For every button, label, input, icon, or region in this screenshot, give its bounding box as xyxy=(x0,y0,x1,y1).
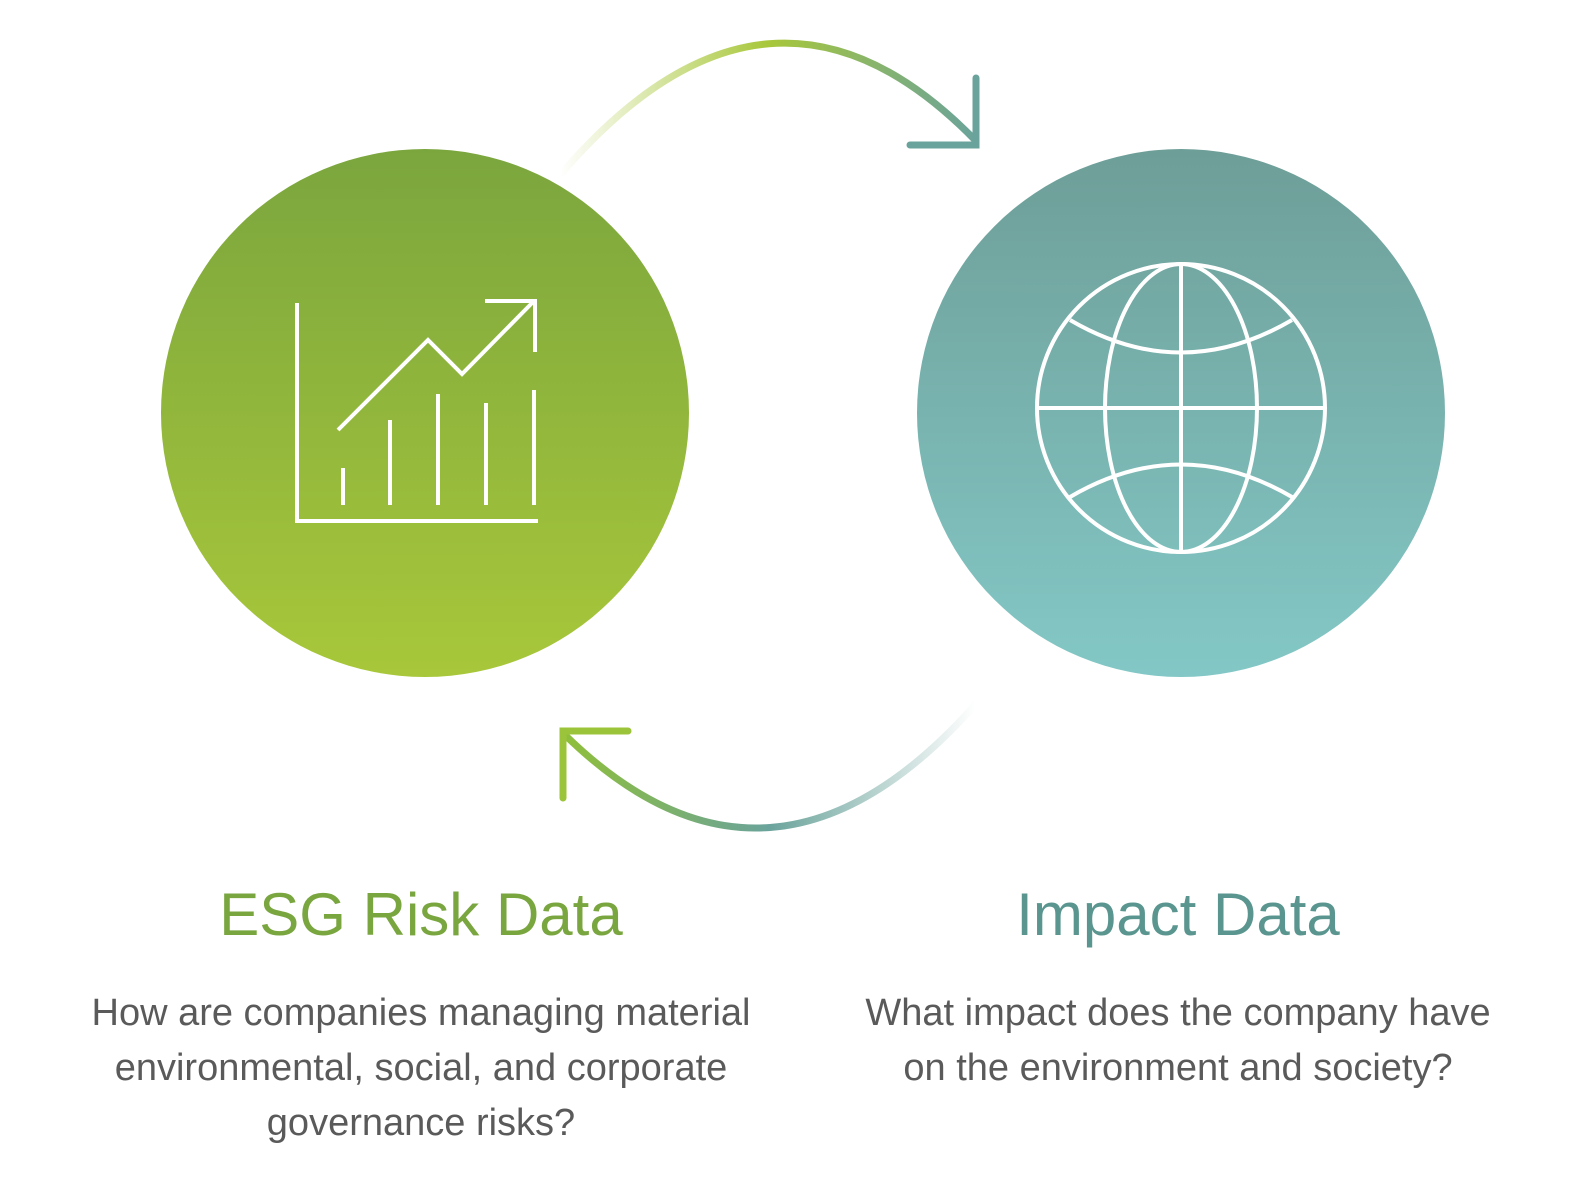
text: ESG description: environmental, social, and corporate xyxy=(115,1047,727,1089)
heading: ESG Risk Data: ESG Risk Data xyxy=(219,881,623,948)
text: ESG description: How are companies managing material xyxy=(92,992,750,1034)
panel: ESG risk circle xyxy=(161,149,689,677)
text: impact description: on the environment and society? xyxy=(903,1047,1453,1089)
text: impact description xyxy=(865,992,1491,1089)
text: ESG description xyxy=(92,992,750,1144)
icon: globe xyxy=(1037,264,1325,552)
text: ESG description: governance risks? xyxy=(267,1102,575,1144)
arrow: bottom arc xyxy=(563,705,975,828)
heading: Impact Data: Impact Data xyxy=(1016,881,1340,948)
icon: chart xyxy=(297,301,538,521)
text: impact description: What impact does the company have xyxy=(865,992,1491,1034)
arrow: top arc xyxy=(560,43,976,175)
panel: impact circle xyxy=(917,149,1445,677)
